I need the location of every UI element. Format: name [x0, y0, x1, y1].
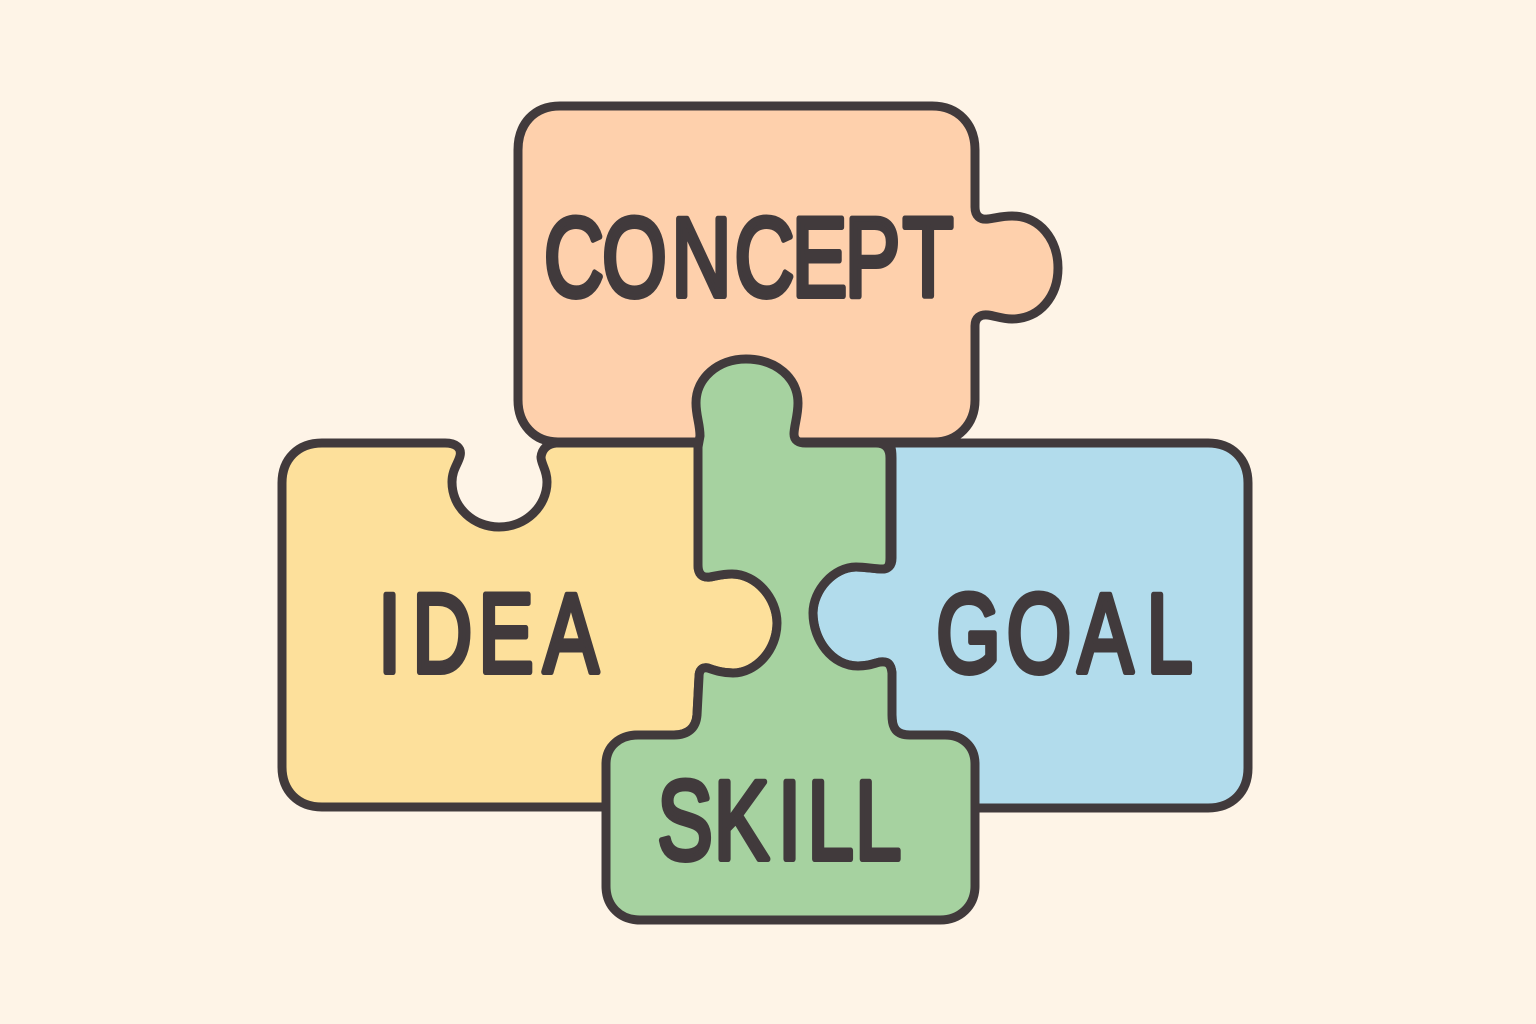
- panel: idea puzzle piece: [282, 443, 777, 807]
- panel: goal puzzle piece: [813, 443, 1248, 808]
- panel: concept puzzle piece: [518, 106, 1058, 442]
- label: SKILL: SKILL: [657, 758, 901, 883]
- label: IDEA: IDEA: [378, 571, 599, 696]
- panel: skill puzzle piece: [606, 359, 975, 920]
- label: CONCEPT: CONCEPT: [544, 195, 953, 320]
- label: GOAL: GOAL: [936, 571, 1193, 696]
